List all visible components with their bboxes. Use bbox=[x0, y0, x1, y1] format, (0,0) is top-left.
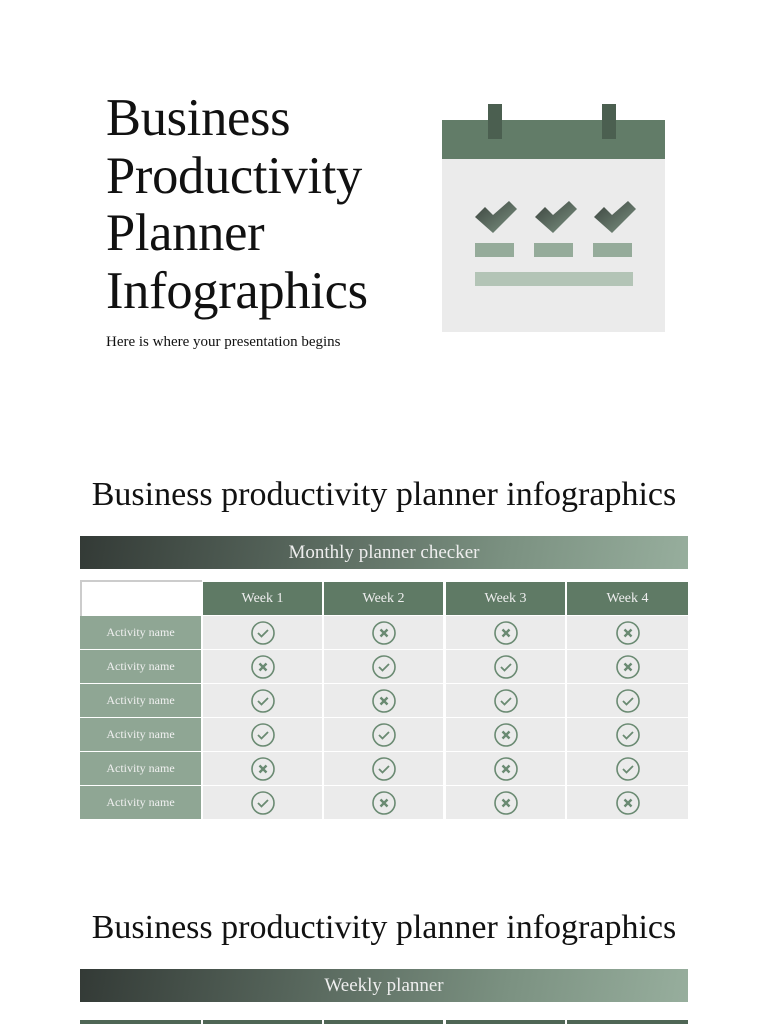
title: Business bbox=[106, 89, 290, 147]
table: monthly: Activity name bbox=[106, 795, 175, 809]
heading 2: Business productivity planner infographics bbox=[92, 909, 676, 946]
heading 1: Business productivity planner infographics bbox=[92, 476, 676, 513]
banner: monthly bbox=[80, 536, 688, 569]
table: monthly: Week 4 bbox=[606, 591, 649, 606]
table: weekly header (cut off) bbox=[80, 1020, 688, 1024]
banner: weekly: Weekly planner bbox=[324, 975, 444, 996]
table: monthly: Week 1 bbox=[241, 591, 284, 606]
banner: monthly: Monthly planner checker bbox=[288, 542, 479, 563]
table: monthly: Week 2 bbox=[362, 591, 405, 606]
table: monthly: Activity name bbox=[106, 761, 175, 775]
table: monthly bbox=[80, 580, 688, 819]
title: Planner bbox=[106, 204, 264, 262]
table: monthly: Activity name bbox=[106, 693, 175, 707]
table: monthly: Activity name bbox=[106, 625, 175, 639]
title: Infographics bbox=[106, 262, 368, 320]
table: monthly: Activity name bbox=[106, 659, 175, 673]
subtitle: Here is where your presentation begins bbox=[106, 334, 341, 350]
icon: calendar bbox=[442, 104, 665, 332]
table: monthly: Activity name bbox=[106, 727, 175, 741]
table: monthly: Week 3 bbox=[484, 591, 527, 606]
banner: weekly bbox=[80, 969, 688, 1002]
title: Productivity bbox=[106, 146, 362, 204]
title bbox=[106, 89, 368, 320]
